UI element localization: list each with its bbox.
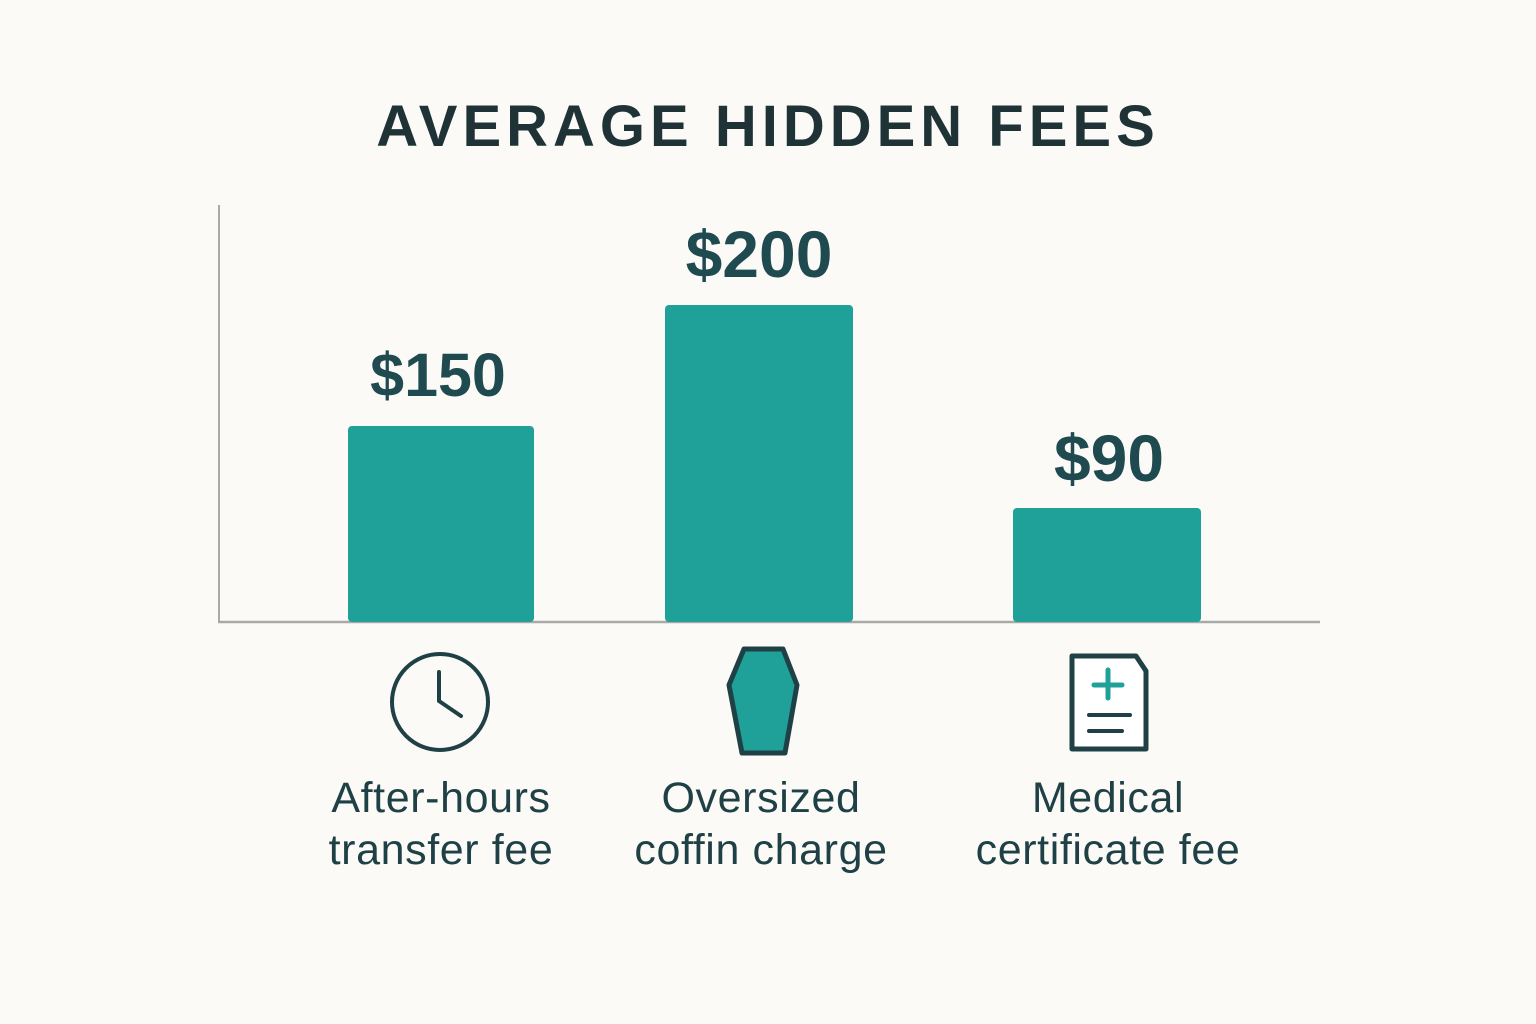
label: after-hours transfer fee: After-hours xyxy=(331,774,551,822)
title: AVERAGE HIDDEN FEES xyxy=(376,94,1160,159)
bar: medical certificate xyxy=(1013,508,1201,622)
icon: medical document xyxy=(1072,656,1146,749)
value label $90: $90 xyxy=(1054,421,1164,495)
value label $150: $150 xyxy=(370,341,506,409)
bar: after-hours xyxy=(348,426,534,622)
icon: clock xyxy=(392,654,488,750)
label: after-hours transfer fee xyxy=(329,774,553,874)
axes xyxy=(218,205,1320,623)
icon: coffin xyxy=(729,649,797,753)
label: oversized coffin charge: coffin charge xyxy=(634,826,888,874)
label: after-hours transfer fee: transfer fee xyxy=(329,826,553,874)
label: medical certificate fee: certificate fee xyxy=(976,826,1240,874)
label: medical certificate fee xyxy=(976,774,1240,874)
bar: oversized coffin xyxy=(665,305,853,622)
label: oversized coffin charge: Oversized xyxy=(662,774,860,822)
value label $200: $200 xyxy=(686,217,832,291)
label: oversized coffin charge xyxy=(634,774,888,874)
label: medical certificate fee: Medical xyxy=(1032,774,1184,822)
